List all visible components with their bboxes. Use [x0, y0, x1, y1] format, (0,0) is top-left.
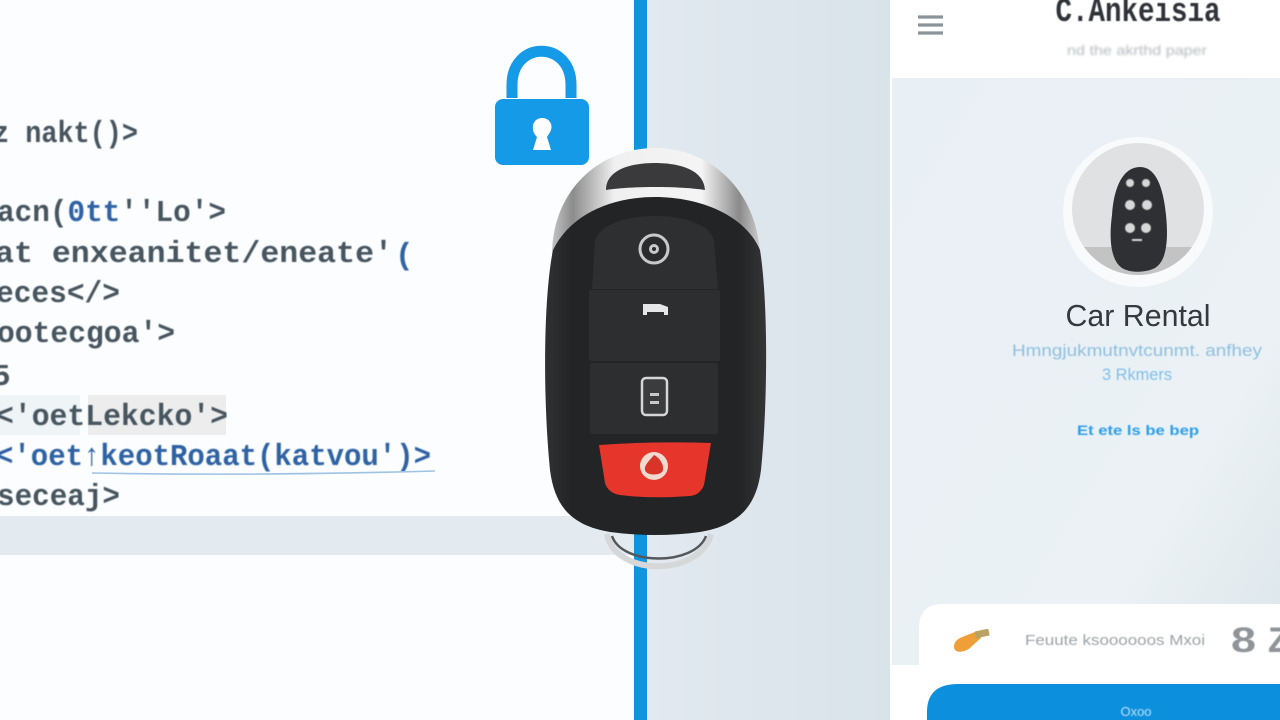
panel: code editor — [0, 0, 636, 720]
app content background — [892, 78, 1280, 720]
bottom card — [919, 604, 1280, 720]
button: car — [589, 290, 720, 361]
button: unlock — [592, 216, 718, 289]
heading: Car Rental: Car Rental — [1066, 298, 1210, 333]
app subtitle: nd the akrthd paper — [1067, 42, 1207, 58]
panel: middle divider area — [647, 0, 890, 720]
card glyphs: 8 — [1231, 621, 1256, 660]
code lines: acn(0tt''Lo'> — [0, 196, 226, 231]
icon: hamburger menu — [918, 17, 943, 33]
button — [927, 684, 1280, 720]
icon: padlock — [495, 51, 589, 165]
app header — [890, 0, 1280, 78]
code lines — [0, 117, 431, 515]
icon: orange key — [954, 629, 990, 652]
panel: phone app — [890, 0, 1280, 720]
code lines: at enxeanitet/eneate' — [0, 237, 393, 272]
blue vertical divider — [634, 0, 647, 720]
fob key slot — [606, 163, 705, 190]
link text: Et ete ls be bep — [1077, 422, 1199, 438]
description text: 3 Rkmers — [1102, 365, 1172, 384]
code lines: seceaj> — [0, 480, 120, 515]
code underline — [92, 471, 435, 474]
fob ring — [607, 534, 711, 566]
fob chrome top — [552, 148, 760, 255]
code lines: <'oetLekcko'> — [0, 400, 228, 435]
card glyphs — [1231, 621, 1280, 660]
fob body — [545, 197, 766, 535]
description text: Hmngjukmutnvtcunmt. anfhey — [1012, 341, 1263, 360]
button: panic — [599, 442, 711, 497]
code lines: <'oet↑keotRoaat(katvou')> — [0, 440, 431, 475]
key fob — [545, 148, 766, 566]
avatar: key fob photo — [1063, 137, 1213, 287]
highlight: selected code line — [0, 395, 226, 435]
button: Oxoo — [1120, 704, 1152, 719]
card label: Feuute ksoooooos Mxoi — [1025, 632, 1205, 649]
button: trunk — [590, 363, 718, 434]
description text — [1012, 341, 1263, 384]
code lines: ootecgoa'> — [0, 317, 175, 352]
code gutter strip — [0, 516, 636, 555]
code lines: ( — [395, 239, 414, 274]
